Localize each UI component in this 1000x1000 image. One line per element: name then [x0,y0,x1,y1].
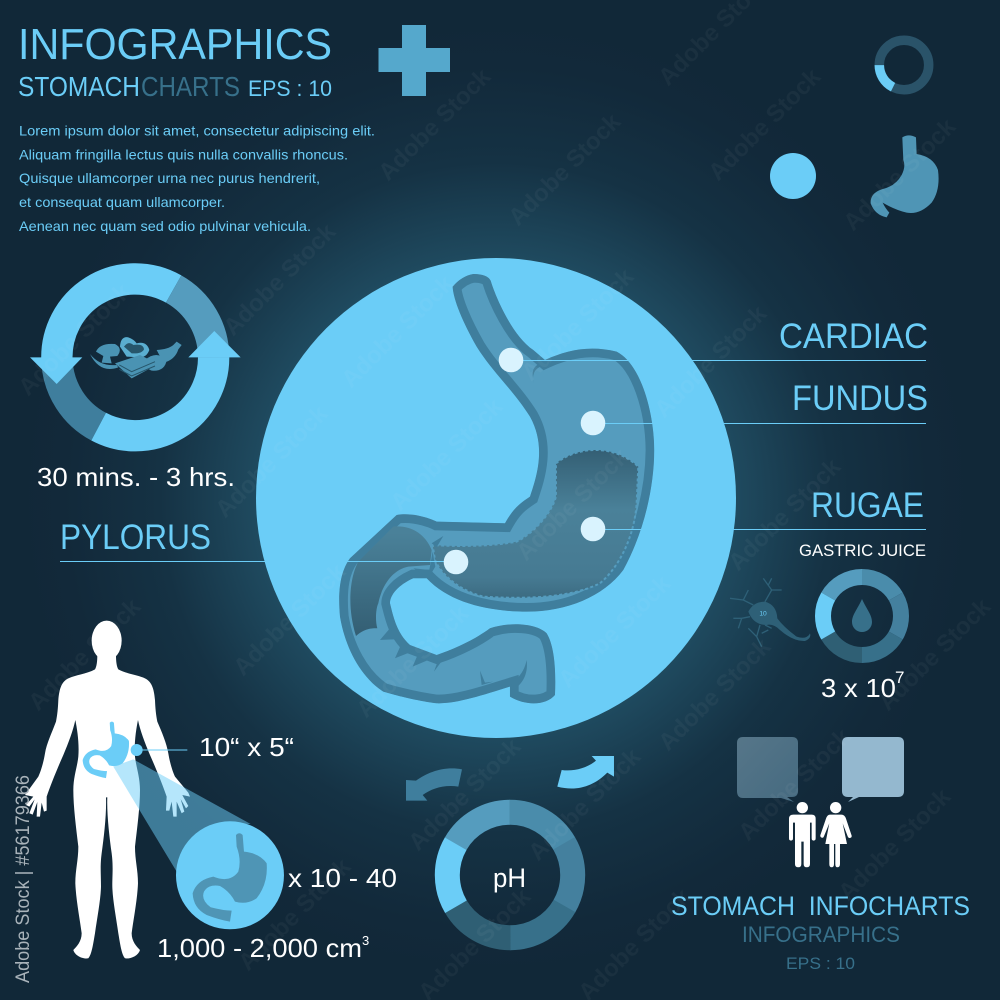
label: size: 10“ x 5“ [199,732,294,762]
top right ring chart [871,32,937,98]
pH ring chart [424,789,596,961]
stock watermarks: Adobe Stock [351,600,475,723]
stock watermarks: Adobe Stock [553,570,677,693]
stomach cavity [433,450,638,598]
vertical stock id: Adobe Stock | #56179366 [13,775,34,983]
digestion cycle ring [30,279,241,436]
intro paragraph: Quisque ullamcorper urna nec purus hendrerit, [19,170,320,186]
title block [18,20,375,234]
stock watermarks: Adobe Stock [385,393,509,516]
neuron number: 10 [759,611,767,618]
stock watermarks: Adobe Stock [653,633,777,756]
label: magnification: x 10 - 40 [288,863,397,893]
label: fundus: FUNDUS [792,379,928,418]
icon: man and woman [789,802,852,867]
stock watermarks: Adobe Stock [210,400,334,523]
callout lines [60,360,926,562]
label: volume: 3 [362,933,369,948]
stock watermarks: Adobe Stock [833,783,957,906]
stock watermarks: Adobe Stock [403,733,527,856]
stock watermarks: Adobe Stock [503,108,627,231]
stock watermarks: Adobe Stock [233,853,357,976]
intro paragraph: et consequat quam ullamcorper. [19,194,225,210]
gastric juice ring chart [809,563,915,669]
arrow: up right [188,331,241,357]
label: digestion time: 30 mins. - 3 hrs. [37,462,235,492]
icon: small stomach [871,135,939,217]
subheading: stomach: STOMACH [18,71,140,102]
body silhouette [25,621,190,958]
duodenum cavity [350,526,432,636]
arrow: right [557,756,614,789]
icon: neuron [730,578,810,647]
pH curved arrows [406,756,614,801]
icon: medical cross [378,25,450,96]
stock watermarks: Adobe Stock [511,443,635,566]
intro paragraph: Aenean nec quam sed odio pulvinar vehicula. [19,218,311,234]
pyloric wall [414,536,443,572]
subheading: charts: CHARTS [141,71,240,102]
label: rugae: RUGAE [811,486,924,525]
stock watermarks: Adobe Stock [838,113,962,236]
icon: water drop [852,599,872,632]
footer eps: EPS : 10 [786,955,855,973]
label: cardiac: CARDIAC [779,317,928,356]
stock watermarks: Adobe Stock [516,263,640,386]
magnify beam [113,759,251,872]
icon: stomach in body [83,722,129,778]
stomach illustration [339,274,654,703]
body marker dot [131,744,143,756]
label: pH: pH [493,863,526,893]
main circle with stomach [256,258,736,738]
intestinal folds [380,628,527,690]
footer subtitle: INFOGRAPHICS [742,922,900,947]
human body figure [25,621,284,958]
footer title: STOMACH INFOCHARTS [671,891,970,921]
subheading: eps: EPS : 10 [248,76,332,101]
magnified stomach [193,833,267,922]
label: 3 x 10^7: 3 x 10 [821,673,896,703]
heading: infographics: INFOGRAPHICS [18,20,332,69]
magnified circle [176,821,284,929]
arrow: left [406,768,462,801]
speech bubble left [737,737,798,802]
stock watermarks: Adobe Stock [218,218,342,341]
stock watermarks: Adobe Stock [13,278,137,401]
stock watermarks: Adobe Stock [723,453,847,576]
label: volume: 1,000 - 2,000 cm [157,933,362,963]
label: 3 x 10^7: 7 [895,668,904,687]
label: pylorus: PYLORUS [60,518,211,557]
stock watermarks: Adobe Stock [373,63,497,186]
stock watermarks: Adobe Stock [336,270,460,393]
stock watermarks: Adobe Stock [523,743,647,866]
stomach markers [444,348,605,574]
intro paragraph [19,122,375,234]
top right dot [770,153,816,199]
stock watermarks: Adobe Stock [228,558,352,681]
intro paragraph: Aliquam fringilla lectus quis nulla convallis rhoncus. [19,146,348,162]
stock watermarks: Adobe Stock [649,300,773,423]
speech bubble right [842,737,904,802]
stock watermarks: Adobe Stock [703,63,827,186]
icon: food pile [90,337,182,378]
stock watermarks: Adobe Stock [733,723,857,846]
cardiac fold [532,365,540,377]
arrow: down left [30,357,82,384]
label: gastric juice: GASTRIC JUICE [799,541,926,560]
stock watermarks: Adobe Stock [23,593,147,716]
stock watermarks: Adobe Stock [873,593,997,716]
intro paragraph: Lorem ipsum dolor sit amet, consectetur adipiscing elit. [19,122,375,138]
